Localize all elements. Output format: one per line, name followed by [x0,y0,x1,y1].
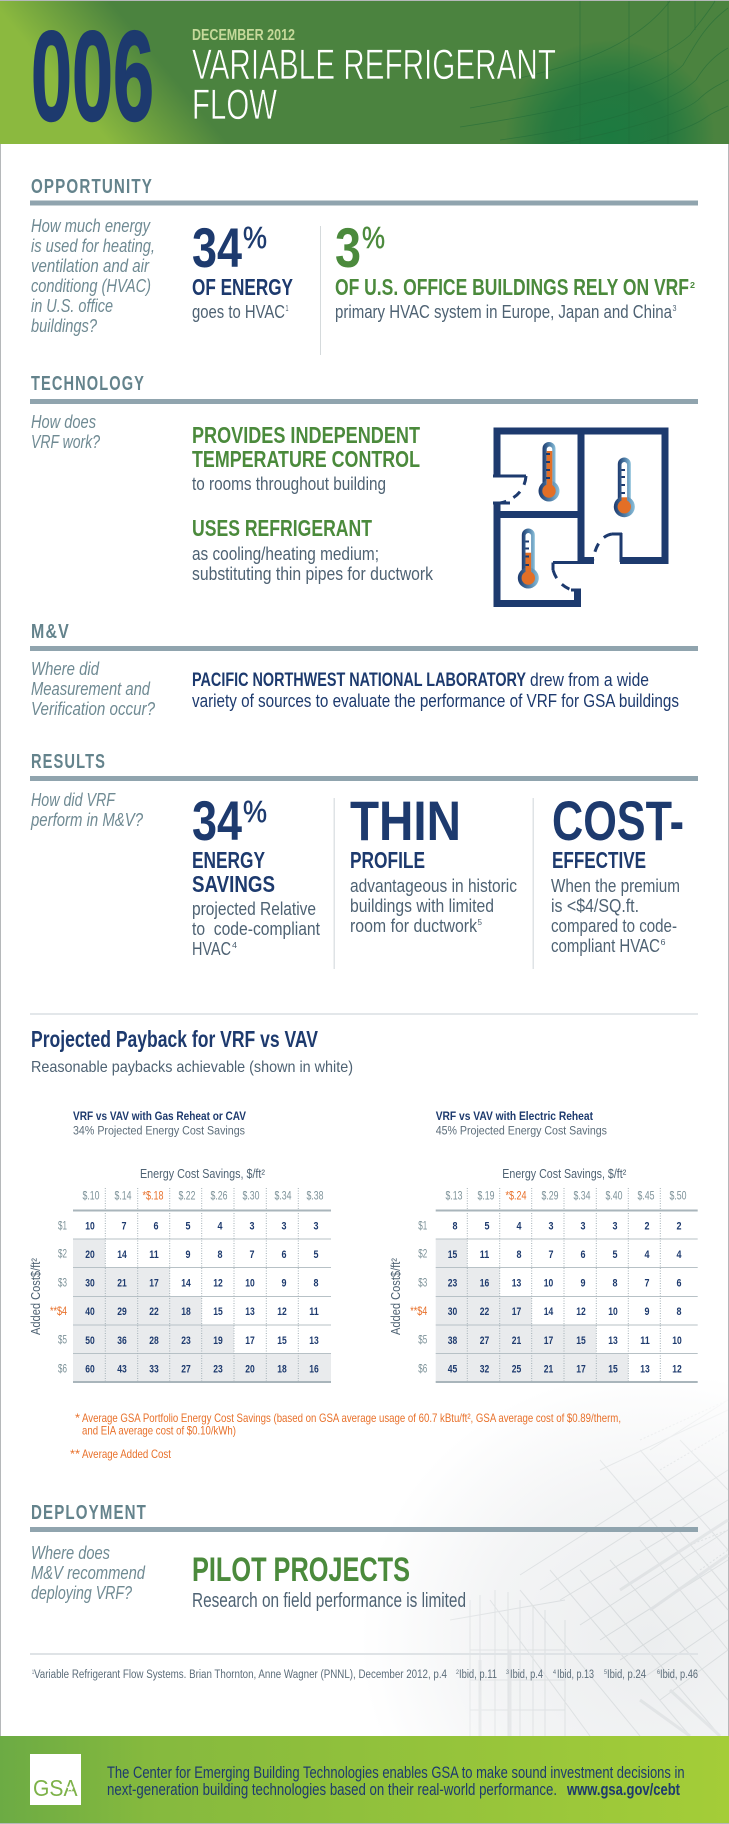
text: pilot projects [192,1551,466,1612]
heading: opportunity: OPPORTUNITY [31,176,153,198]
column headers: $.40 [606,1189,623,1203]
column headers: *$.18 [142,1189,164,1203]
section: opportunity [30,176,698,355]
question: technology: How does [31,412,96,432]
result: 34% energy savings: 34 [192,789,242,852]
stat: 3% of buildings: % [362,220,385,255]
stat: 3% of buildings: 3 [672,304,677,313]
citations: Ibid, p.11 [459,1669,497,1681]
date: DECEMBER 2012 [192,27,295,44]
table cells: gas reheat: 50 [85,1335,95,1347]
result: 34% energy savings: to code-compliant [192,918,320,939]
table cells: electric reheat: 30 [448,1306,457,1318]
question: technology: VRF work? [31,432,100,452]
title [192,41,556,129]
footer text: www.gsa.gov/cebt [566,1780,680,1799]
question: opportunity: buildings? [31,316,97,336]
footnotes: table notes: Average Added Cost [82,1447,172,1461]
text: uses refrigerant: USES REFRIGERANT [192,515,372,541]
result: cost-effective: compliant HVAC [551,935,660,956]
table cells: electric reheat: 3 [612,1220,618,1232]
table cells: electric reheat: 22 [480,1306,489,1318]
footer text: next-generation building technologies based on their real-world performance. [107,1780,557,1799]
result: cost-effective: COST- [552,789,684,852]
table cells: electric reheat: 4 [644,1249,650,1261]
header banner [0,1,729,148]
stat: 3% of buildings: 3 [335,216,361,279]
result: 34% energy savings: SAVINGS [192,871,275,897]
table cells: electric reheat: 3 [580,1220,586,1232]
column headers [82,1189,324,1203]
heading: deployment: DEPLOYMENT [31,1502,147,1524]
row headers: $5 [58,1332,67,1346]
table title: gas reheat [73,1111,246,1138]
column headers: $.34 [274,1189,292,1203]
citations: 1 [32,1669,34,1676]
table cells: gas reheat: 21 [117,1278,127,1290]
table cells: electric reheat: 10 [672,1335,682,1347]
text: pilot projects: PILOT PROJECTS [192,1551,410,1589]
table cells: gas reheat: 29 [117,1306,127,1318]
section: M&V [30,621,698,719]
table cells: electric reheat: 7 [644,1278,650,1290]
citations: Variable Refrigerant Flow Systems. Brian Thornton, Anne Wagner (PNNL), December 2012, p.4 [34,1669,448,1681]
table cells: gas reheat: 3 [250,1220,254,1232]
footnotes: table notes: * [75,1411,80,1425]
question: M&V: Measurement and [31,679,151,699]
table cells: gas reheat: 23 [213,1363,223,1375]
table cells: gas reheat: 11 [149,1249,159,1261]
table cells: gas reheat: 7 [122,1220,126,1232]
column headers: $.45 [638,1189,655,1203]
row headers [410,1218,428,1375]
table cells: electric reheat: 14 [544,1306,554,1318]
stat: 34% of energy: 1 [286,304,289,313]
question: deployment: M&V recommend [31,1563,146,1583]
table cells: electric reheat: 12 [576,1306,586,1318]
row headers [50,1218,67,1375]
row headers: $6 [418,1361,428,1375]
table cells: gas reheat: 7 [250,1249,254,1261]
rotated axis title: added cost: Added Cost$/ft² [389,1258,403,1335]
title: FLOW [192,81,277,129]
result: 34% energy savings: 4 [232,941,238,950]
question: opportunity [31,216,155,336]
background: building wireframe [448,1404,729,1736]
table title: gas reheat: 34% Projected Energy Cost Savings [73,1126,245,1138]
table title: gas reheat: VRF vs VAV with Gas Reheat or CAV [73,1111,246,1123]
column headers: $.34 [574,1189,591,1203]
table cells: electric reheat: 2 [644,1220,650,1232]
result: cost-effective [551,789,684,956]
table cells: electric reheat: 9 [644,1306,650,1318]
question: results: How did VRF [31,790,116,810]
result: thin profile: advantageous in historic [350,875,517,896]
text: pilot projects: Research on field performance is limited [192,1590,466,1612]
table cells: electric reheat [448,1220,682,1375]
text: PNNL description: PACIFIC NORTHWEST NATIONAL LABORATORY [192,670,526,691]
table cells: gas reheat: 8 [218,1249,222,1261]
result: cost-effective: compared to code- [551,915,677,936]
stat: 34% of energy: 34 [192,216,242,279]
column headers: $.30 [242,1189,260,1203]
table cells: electric reheat: 4 [516,1220,522,1232]
result: thin profile [350,789,517,936]
table cells: gas reheat: 16 [309,1363,319,1375]
column headers: $.19 [478,1189,495,1203]
table cells: gas reheat: 15 [213,1306,223,1318]
table cells: gas reheat: 18 [277,1363,287,1375]
question: results [30,790,143,830]
result: 34% energy savings: HVAC [192,938,231,959]
question: opportunity: How much energy [31,216,151,236]
table cells: electric reheat: 17 [544,1335,553,1347]
stat: 34% of energy [192,216,293,322]
section: results [30,751,698,969]
table cells: electric reheat: 15 [448,1249,457,1261]
table cells: electric reheat: 15 [608,1363,618,1375]
table cells: electric reheat: 5 [484,1220,490,1232]
stat: 3% of buildings: 2 [690,281,696,290]
question: deployment: Where does [31,1543,110,1563]
table cells: gas reheat: 9 [282,1278,286,1290]
table cells: electric reheat: 21 [544,1363,553,1375]
table cells: electric reheat: 3 [548,1220,554,1232]
section: technology [30,373,698,604]
citations: Ibid, p.24 [607,1669,646,1681]
table cells: electric reheat: 8 [516,1249,522,1261]
question: deployment: deploying VRF? [31,1583,132,1603]
table cells: gas reheat: 5 [186,1220,190,1232]
table cells: gas reheat: 14 [117,1249,127,1261]
result: 34% energy savings: projected Relative [192,898,316,919]
citations: 3 [506,1669,509,1676]
result: thin profile: buildings with limited [350,895,494,916]
text: independent temperature control [192,422,420,494]
table cells: electric reheat: 32 [480,1363,489,1375]
table cells: gas reheat: 4 [218,1220,223,1232]
result: cost-effective: EFFECTIVE [552,847,646,873]
result: thin profile: room for ductwork [350,915,478,936]
citations: 2 [456,1669,459,1676]
text: independent temperature control: to rooms throughout building [192,473,386,494]
citations: 6 [657,1669,660,1676]
table cells: gas reheat: 12 [277,1306,287,1318]
table cells: electric reheat: 45 [448,1363,457,1375]
row headers: **$4 [410,1304,428,1318]
table cells: electric reheat: 11 [640,1335,650,1347]
logo: GSA: GSA [33,1775,78,1801]
table cells: gas reheat: 18 [181,1306,191,1318]
table: electric reheat [389,1111,698,1383]
table cells: gas reheat: 10 [245,1278,255,1290]
result: 34% energy savings [192,789,320,959]
stat: 34% of energy: goes to HVAC [192,301,285,322]
result: thin profile: THIN [350,789,461,852]
row headers: $6 [58,1361,67,1375]
result: 34% energy savings: ENERGY [192,847,265,873]
heading: results: RESULTS [31,751,106,773]
table cells: electric reheat: 11 [480,1249,489,1261]
heading: technology: TECHNOLOGY [31,373,145,395]
table cells: gas reheat: 9 [186,1249,190,1261]
text: uses refrigerant [192,515,434,584]
row headers: $2 [418,1246,428,1260]
table cells: gas reheat: 5 [314,1249,318,1261]
table cells: electric reheat: 25 [512,1363,521,1375]
axis title: energy cost savings: Energy Cost Savings, $/ft² [140,1167,265,1181]
table cells: gas reheat: 27 [181,1363,191,1375]
question: M&V: Verification occur? [31,699,155,719]
title: VARIABLE REFRIGERANT [192,41,556,89]
table cells: gas reheat: 28 [149,1335,159,1347]
table cells: gas reheat: 33 [149,1363,159,1375]
column headers: $.26 [210,1189,228,1203]
column headers: $.10 [82,1189,100,1203]
citations: 4 [553,1669,556,1676]
table cells: gas reheat: 20 [85,1249,95,1261]
table cells: gas reheat: 14 [181,1278,191,1290]
table cells: gas reheat [85,1220,319,1375]
text: PNNL description [192,669,679,711]
thermometer 2 [614,458,635,517]
table cells: gas reheat: 3 [282,1220,286,1232]
logo: GSA [30,1754,81,1805]
result: cost-effective: When the premium [551,875,680,896]
table cells: gas reheat: 3 [314,1220,318,1232]
icon: floor plan with thermometers [493,431,665,604]
footnotes: table notes: and EIA average cost of $0.10/kWh) [82,1424,236,1438]
column headers: $.38 [306,1189,324,1203]
column headers: $.50 [670,1189,687,1203]
table cells: gas reheat: 30 [85,1278,95,1290]
column headers [446,1189,687,1203]
footnotes: table notes [70,1411,621,1461]
citations: Ibid, p.46 [660,1669,698,1681]
question: opportunity: is used for heating, [31,236,155,256]
citations: Ibid, p.13 [557,1669,594,1681]
table cells: gas reheat: 13 [245,1306,255,1318]
table cells: gas reheat: 22 [149,1306,159,1318]
table cells: electric reheat: 17 [576,1363,586,1375]
citations: Ibid, p.4 [510,1669,543,1681]
table cells: electric reheat: 5 [612,1249,618,1261]
row headers: $2 [58,1246,67,1260]
table cells: gas reheat: 17 [149,1278,159,1290]
table cells: gas reheat: 15 [277,1335,287,1347]
thermometer 3 [518,528,539,588]
question: opportunity: ventilation and air [31,256,150,276]
table cells: electric reheat: 8 [676,1306,682,1318]
table cells: electric reheat: 23 [448,1278,457,1290]
table cells: gas reheat: 19 [213,1335,223,1347]
table cells: gas reheat: 6 [282,1249,286,1261]
result: thin profile: PROFILE [350,847,425,873]
row headers: $3 [58,1276,67,1290]
row headers: $1 [418,1218,428,1232]
heading: M&V: M&V [31,621,70,643]
text: uses refrigerant: substituting thin pipes for ductwork [192,563,434,584]
axis title: energy cost savings: Energy Cost Savings, $/ft² [502,1167,626,1181]
table cells: gas reheat: 20 [245,1363,255,1375]
table cells: gas reheat: 10 [85,1220,95,1232]
stat: 34% of energy: OF ENERGY [192,274,293,300]
table cells: electric reheat: 13 [512,1278,521,1290]
result: cost-effective: 6 [660,938,666,947]
result: 34% energy savings: % [243,794,267,829]
text: independent temperature control: PROVIDES INDEPENDENT [192,422,420,448]
table cells: electric reheat: 15 [576,1335,586,1347]
table title: electric reheat: VRF vs VAV with Electric Reheat [436,1111,593,1123]
column headers: $.14 [114,1189,132,1203]
table cells: electric reheat: 38 [448,1335,457,1347]
table cells: electric reheat: 17 [512,1306,521,1318]
column headers: *$.24 [506,1189,527,1203]
column headers: $.13 [446,1189,463,1203]
table cells: gas reheat: 43 [117,1363,127,1375]
question: deployment [31,1543,146,1603]
table cells: electric reheat: 9 [580,1278,586,1290]
table cells: gas reheat: 12 [213,1278,223,1290]
table cells: gas reheat: 13 [309,1335,319,1347]
table cells: electric reheat: 2 [676,1220,682,1232]
question: results: perform in M&V? [30,810,143,830]
table cells: electric reheat: 27 [480,1335,489,1347]
table cells: electric reheat: 7 [548,1249,554,1261]
stat: 34% of energy: % [243,220,267,255]
column headers: $.29 [542,1189,559,1203]
table cells: electric reheat: 21 [512,1335,521,1347]
table cells: electric reheat: 10 [544,1278,553,1290]
thermometer 1 [538,442,560,502]
table cells: electric reheat: 8 [612,1278,618,1290]
table cells: gas reheat: 17 [245,1335,255,1347]
table cells: electric reheat: 6 [580,1249,586,1261]
table title: electric reheat: 45% Projected Energy Cost Savings [436,1126,607,1138]
table: gas reheat [29,1111,331,1383]
table cells: gas reheat: 8 [314,1278,318,1290]
footnotes: table notes: ** [70,1447,80,1461]
row headers: $5 [418,1332,428,1346]
table cells: gas reheat: 40 [85,1306,95,1318]
table cells: gas reheat: 23 [181,1335,191,1347]
text: PNNL description: drew from a wide [530,669,649,690]
result: thin profile: 5 [478,918,483,927]
table cells: electric reheat: 16 [480,1278,489,1290]
section: deployment [30,1502,698,1612]
row headers: $1 [58,1218,67,1232]
table cells: gas reheat: 11 [309,1306,319,1318]
table cells: gas reheat: 60 [85,1363,95,1375]
question: opportunity: in U.S. office [31,296,113,316]
result: cost-effective: is <$4/SQ.ft. [551,895,639,916]
column headers: $.22 [178,1189,196,1203]
table title: electric reheat [436,1111,607,1138]
table cells: gas reheat: 6 [154,1220,158,1232]
heading: projected payback: Projected Payback for VRF vs VAV [31,1026,319,1052]
row headers: $3 [418,1276,428,1290]
question: M&V: Where did [31,659,100,679]
table cells: gas reheat: 36 [117,1335,127,1347]
citations: 5 [604,1669,607,1676]
subheading: projected payback: Reasonable paybacks achievable (shown in white) [31,1059,353,1076]
rotated axis title: added cost: Added Cost$/ft² [29,1258,43,1335]
table cells: electric reheat: 10 [608,1306,618,1318]
question: technology [31,412,100,452]
text: uses refrigerant: as cooling/heating medium; [192,543,379,564]
section: projected payback [29,1026,698,1461]
report number: 006 [31,6,154,148]
text: independent temperature control: TEMPERATURE CONTROL [192,446,420,472]
table cells: electric reheat: 13 [640,1363,650,1375]
table cells: electric reheat: 6 [676,1278,682,1290]
question: opportunity: conditiong (HVAC) [31,276,151,296]
row headers: **$4 [50,1304,67,1318]
table cells: electric reheat: 8 [452,1220,458,1232]
footer text [107,1763,685,1799]
table cells: electric reheat: 12 [672,1363,682,1375]
table cells: electric reheat: 13 [608,1335,618,1347]
question: M&V [31,659,155,719]
footer band [0,1736,729,1823]
table cells: electric reheat: 4 [676,1249,682,1261]
stat: 3% of buildings [335,216,696,322]
